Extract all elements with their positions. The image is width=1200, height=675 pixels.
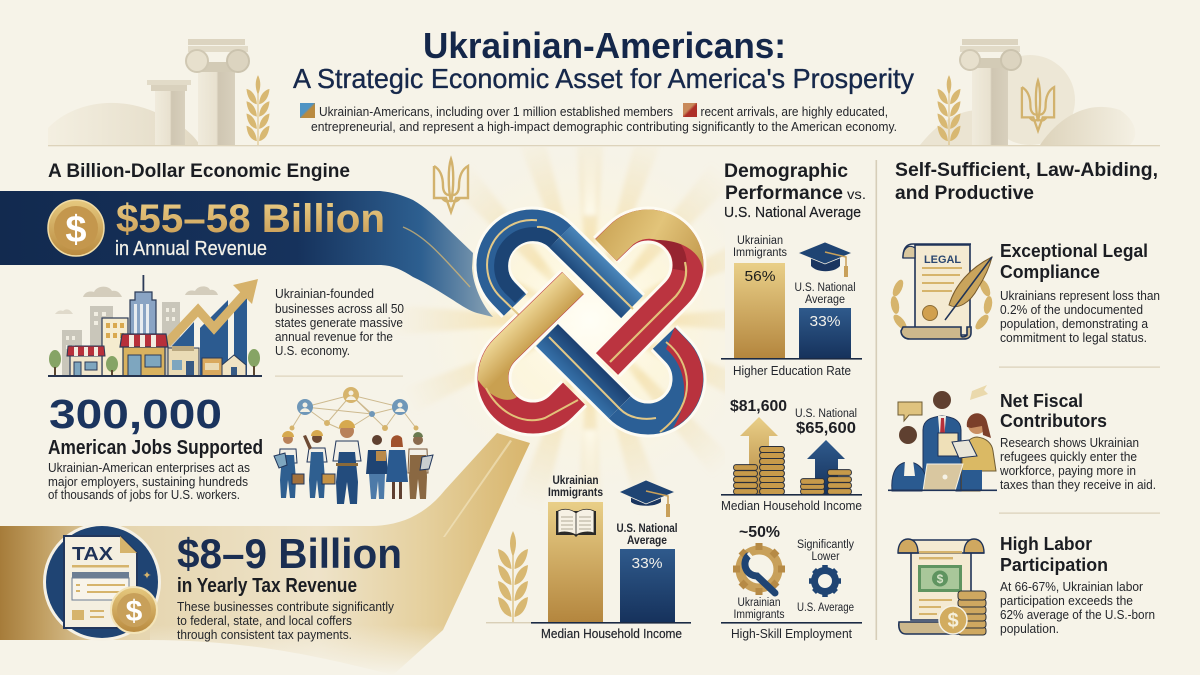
chart: high-skill employment: Ukrainian xyxy=(738,597,780,609)
stat: annual revenue: in Annual Revenue xyxy=(115,238,267,260)
chart: higher education rate xyxy=(721,235,862,378)
block: net fiscal contributors: Net Fiscal xyxy=(1000,391,1083,411)
block: legal compliance: 0.2% of the undocumented xyxy=(1000,302,1143,317)
section heading: self-sufficient xyxy=(895,159,1158,204)
icon: open book xyxy=(556,509,596,537)
stat: jobs supported xyxy=(48,391,263,502)
block: net fiscal contributors: workforce, paying more in xyxy=(999,463,1136,478)
text: revenue description xyxy=(275,286,404,358)
block: high labor participation: population. xyxy=(1000,621,1059,636)
chart: higher education rate: Immigrants xyxy=(733,247,787,259)
icon: graduation cap xyxy=(619,480,675,517)
stat: tax revenue: to federal, state, and local coffers xyxy=(177,613,352,628)
illustration: workers and network xyxy=(274,387,433,504)
section heading: economic engine: A Billion-Dollar Economic Engine xyxy=(48,160,350,182)
icon: tax document and coin: $ xyxy=(126,595,143,628)
chart: median household income bars: Immigrants xyxy=(548,487,603,499)
chart: median household income bars: Median Household Income xyxy=(541,627,682,641)
icon: legal scroll, quill and laurels xyxy=(889,244,994,340)
icon: dollar coin xyxy=(48,200,104,256)
block: high labor participation: High Labor xyxy=(1000,534,1092,554)
block: high labor participation: participation exceeds the xyxy=(1000,593,1133,608)
stat: jobs supported: major employers, sustaining hundreds xyxy=(48,474,248,489)
stat: tax revenue: These businesses contribute significantly xyxy=(177,599,394,614)
icon: scroll with banknote and coins: $ xyxy=(937,572,944,586)
chart: median household income bars: Ukrainian xyxy=(552,475,598,487)
intro text: entrepreneurial, and represent a high-impact demographic contributing significantly to the American economy. xyxy=(311,119,897,134)
knot: blue upper band xyxy=(487,220,633,315)
icon: scroll with banknote and coins xyxy=(898,539,986,635)
stat: jobs supported: American Jobs Supported xyxy=(48,436,263,459)
decoration: left columns and wheat xyxy=(48,39,270,145)
stat: jobs supported: 300,000 xyxy=(49,391,222,437)
chart: higher education rate: Ukrainian xyxy=(737,235,783,247)
icon: tax document and coin: TAX xyxy=(72,544,113,564)
section heading: self-sufficient: Self-Sufficient, Law-Abiding, xyxy=(895,159,1158,181)
block: net fiscal contributors: refugees quickly enter the xyxy=(1000,449,1137,464)
decoration: right column, wheat and trident xyxy=(920,39,1135,145)
chart: household income arrows and coins: $81,600 xyxy=(730,398,787,415)
intro text: recent arrivals, are highly educated, xyxy=(700,104,888,119)
intro text: Ukrainian-Americans, including over 1 million established members xyxy=(319,104,673,119)
section heading: demographic performance: Performance xyxy=(725,182,843,204)
stat: tax revenue xyxy=(177,530,402,642)
block: net fiscal contributors: taxes than they receive in aid. xyxy=(1000,477,1156,492)
chart: median household income bars xyxy=(531,475,691,641)
chart: median household income bars: U.S. National xyxy=(616,523,678,535)
chart: higher education rate: Higher Education Rate xyxy=(733,364,851,378)
block: net fiscal contributors xyxy=(999,391,1156,492)
block: net fiscal contributors: Research shows Ukrainian xyxy=(1000,435,1139,450)
text: revenue description: Ukrainian-founded xyxy=(275,286,374,301)
section heading: demographic performance: vs. xyxy=(847,186,866,202)
chart: higher education rate: 56% xyxy=(744,268,776,285)
section heading: demographic performance: Demographic xyxy=(724,160,848,182)
title block xyxy=(293,25,914,134)
block: high labor participation: At 66-67%, Ukrainian labor xyxy=(1000,579,1144,594)
section heading: demographic performance: U.S. National Average xyxy=(724,204,861,221)
chart: high-skill employment: Immigrants xyxy=(734,609,785,621)
icon: tax document and coin xyxy=(43,523,161,641)
text: revenue description: annual revenue for the xyxy=(275,329,393,344)
block: legal compliance: commitment to legal status. xyxy=(1000,330,1147,345)
block: net fiscal contributors: Contributors xyxy=(1000,411,1107,431)
chart: household income arrows and coins xyxy=(721,398,862,513)
title: Ukrainian-Americans: xyxy=(423,25,786,66)
subtitle: A Strategic Economic Asset for America's Prosperity xyxy=(293,63,914,94)
gold ribbon band xyxy=(0,433,530,675)
text: revenue description: U.S. economy. xyxy=(275,343,350,358)
icon: dollar coin: $ xyxy=(65,209,87,251)
stat: jobs supported: Ukrainian-American enterprises act as xyxy=(48,460,250,475)
chart: higher education rate: U.S. National xyxy=(794,282,856,294)
knot: blue lower band xyxy=(547,327,703,432)
illustration: city and growth xyxy=(48,275,262,377)
block: legal compliance xyxy=(1000,241,1160,345)
stat: tax revenue: through consistent tax payments. xyxy=(177,627,352,642)
sunburst behind the knot xyxy=(410,147,725,500)
chart: median household income bars: 33% xyxy=(632,555,662,572)
icon: scroll with banknote and coins: $ xyxy=(947,610,959,632)
icon: blue gear xyxy=(809,565,841,597)
icon: legal scroll, quill and laurels: LEGAL xyxy=(924,254,961,266)
worker figures xyxy=(274,420,433,504)
block: high labor participation xyxy=(1000,534,1155,636)
text: revenue description: states generate massive xyxy=(275,315,403,330)
block: legal compliance: Compliance xyxy=(1000,262,1100,282)
text: revenue description: businesses across all 50 xyxy=(275,301,404,316)
stat: tax revenue: $8–9 Billion xyxy=(177,530,402,577)
icon: graduation cap xyxy=(798,242,852,277)
icon: coin stacks xyxy=(734,446,851,494)
block: legal compliance: Exceptional Legal xyxy=(1000,241,1148,261)
chart: high-skill employment: High-Skill Employment xyxy=(731,627,853,641)
section heading: self-sufficient: and Productive xyxy=(895,182,1034,204)
icon: trident above the ribbon xyxy=(434,159,468,212)
central interlinked knot xyxy=(478,210,703,432)
chart: high-skill employment: ~50% xyxy=(739,524,780,541)
chart: high-skill employment: Significantly xyxy=(797,539,854,551)
navy revenue ribbon xyxy=(0,191,493,317)
stat: annual revenue: $55–58 Billion xyxy=(116,197,385,241)
stat: jobs supported: of thousands of jobs for U.S. workers. xyxy=(48,487,240,502)
block: legal compliance: Ukrainians represent loss than xyxy=(1000,288,1160,303)
icon: tax document and coin: ✦ xyxy=(142,570,152,582)
block: high labor participation: 62% average of the U.S.-born xyxy=(1000,607,1155,622)
knot: red and gold right band xyxy=(595,210,703,364)
stat: annual revenue xyxy=(115,197,385,260)
intro text xyxy=(300,103,897,134)
stat: tax revenue: in Yearly Tax Revenue xyxy=(177,575,357,597)
chart: household income arrows and coins: $65,600 xyxy=(796,420,856,437)
chart: high-skill employment: U.S. Average xyxy=(797,602,854,614)
ribbon fade xyxy=(150,625,450,675)
chart: high-skill employment xyxy=(721,524,862,641)
ribbon highlight xyxy=(403,227,470,287)
block: high labor participation: Participation xyxy=(1000,555,1108,575)
chart: household income arrows and coins: U.S. National xyxy=(795,408,857,420)
icon: business team with laptop xyxy=(888,385,997,491)
chart: higher education rate: Average xyxy=(805,294,845,306)
ribbon streak xyxy=(443,440,512,537)
icon: gold gear and wrench xyxy=(733,543,785,595)
section heading: demographic performance xyxy=(724,160,866,221)
knot: gold and red left band xyxy=(478,272,584,420)
chart: higher education rate: 33% xyxy=(810,313,840,330)
chart: median household income bars: Average xyxy=(627,535,667,547)
illustration: wheat stalk beside bar chart xyxy=(498,531,528,622)
block: legal compliance: population, demonstrating a xyxy=(1000,316,1149,331)
chart: high-skill employment: Lower xyxy=(812,551,840,563)
chart: household income arrows and coins: Median Household Income xyxy=(721,499,862,513)
